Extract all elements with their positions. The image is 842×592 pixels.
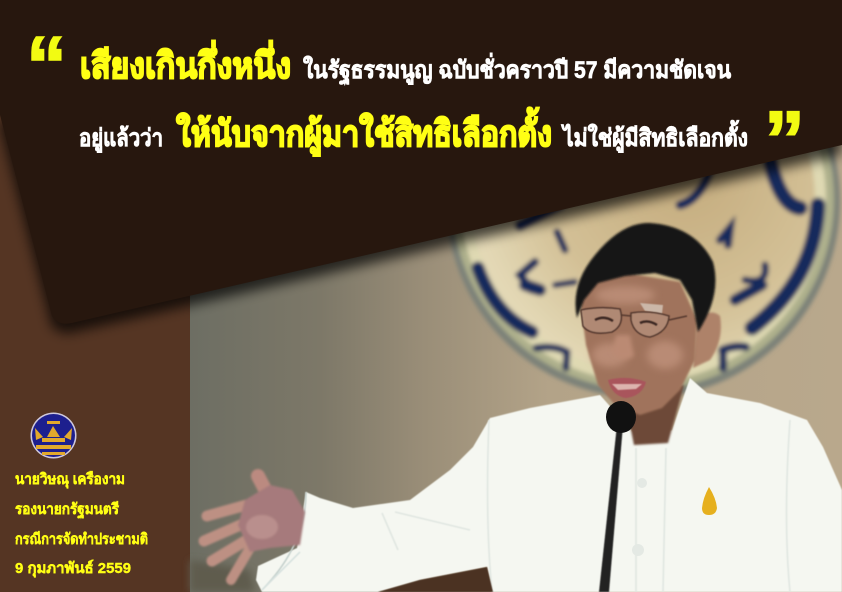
- icon: cabinet seal logo: [30, 412, 76, 458]
- speaker title: รองนายกรัฐมนตรี: [15, 501, 120, 519]
- eyes: [595, 318, 657, 325]
- speaker credit: [15, 470, 148, 578]
- government seal on wall: [446, 4, 840, 398]
- dark wall corner under hand: [190, 560, 255, 592]
- dark quote banner: [0, 0, 842, 324]
- glasses: [581, 308, 687, 337]
- royal pin: [702, 487, 717, 515]
- nose: [612, 335, 634, 359]
- opening quote mark: “: [26, 20, 67, 111]
- highlight: เสียงเกินกึ่งหนึ่ง: เสียงเกินกึ่งหนึ่ง: [80, 40, 291, 86]
- date: 9 กุมภาพันธ์ 2559: [15, 559, 131, 578]
- closing quote mark: ”: [764, 95, 805, 186]
- mouth: [608, 378, 646, 398]
- speaker name: นายวิษณุ เครืองาม: [15, 470, 125, 489]
- forehead highlight: [640, 303, 663, 314]
- microphone: [599, 401, 636, 592]
- face: [580, 272, 697, 415]
- cheek highlights: [592, 286, 683, 369]
- quote line 2: [79, 107, 748, 157]
- jacket shading: [262, 420, 790, 592]
- quote line 1: [80, 40, 732, 86]
- hand: [204, 476, 305, 580]
- neck: [625, 385, 684, 445]
- brown wedge under the arm: [378, 567, 493, 592]
- hair: [575, 223, 715, 332]
- occasion: กรณีการจัดทำประชามติ: [15, 530, 148, 548]
- white text start: อยู่แล้วว่า: [79, 125, 163, 153]
- white text end: ไม่ใช่ผู้มีสิทธิเลือกตั้ง: [560, 119, 748, 153]
- jacket buttons: [637, 478, 647, 488]
- press conference photo: [190, 4, 842, 592]
- jacket and sleeve: [256, 378, 842, 592]
- ear: [693, 312, 721, 368]
- left brown column: [0, 0, 190, 592]
- wall background: [190, 100, 842, 592]
- banner shadow: [0, 120, 842, 334]
- white text line 1: ในรัฐธรรมนูญ ฉบับชั่วคราวปี 57 มีความชัดเจน: [303, 52, 732, 86]
- highlight: ให้นับจากผู้มาใช้สิทธิเลือกตั้ง: ให้นับจากผู้มาใช้สิทธิเลือกตั้ง: [176, 107, 552, 157]
